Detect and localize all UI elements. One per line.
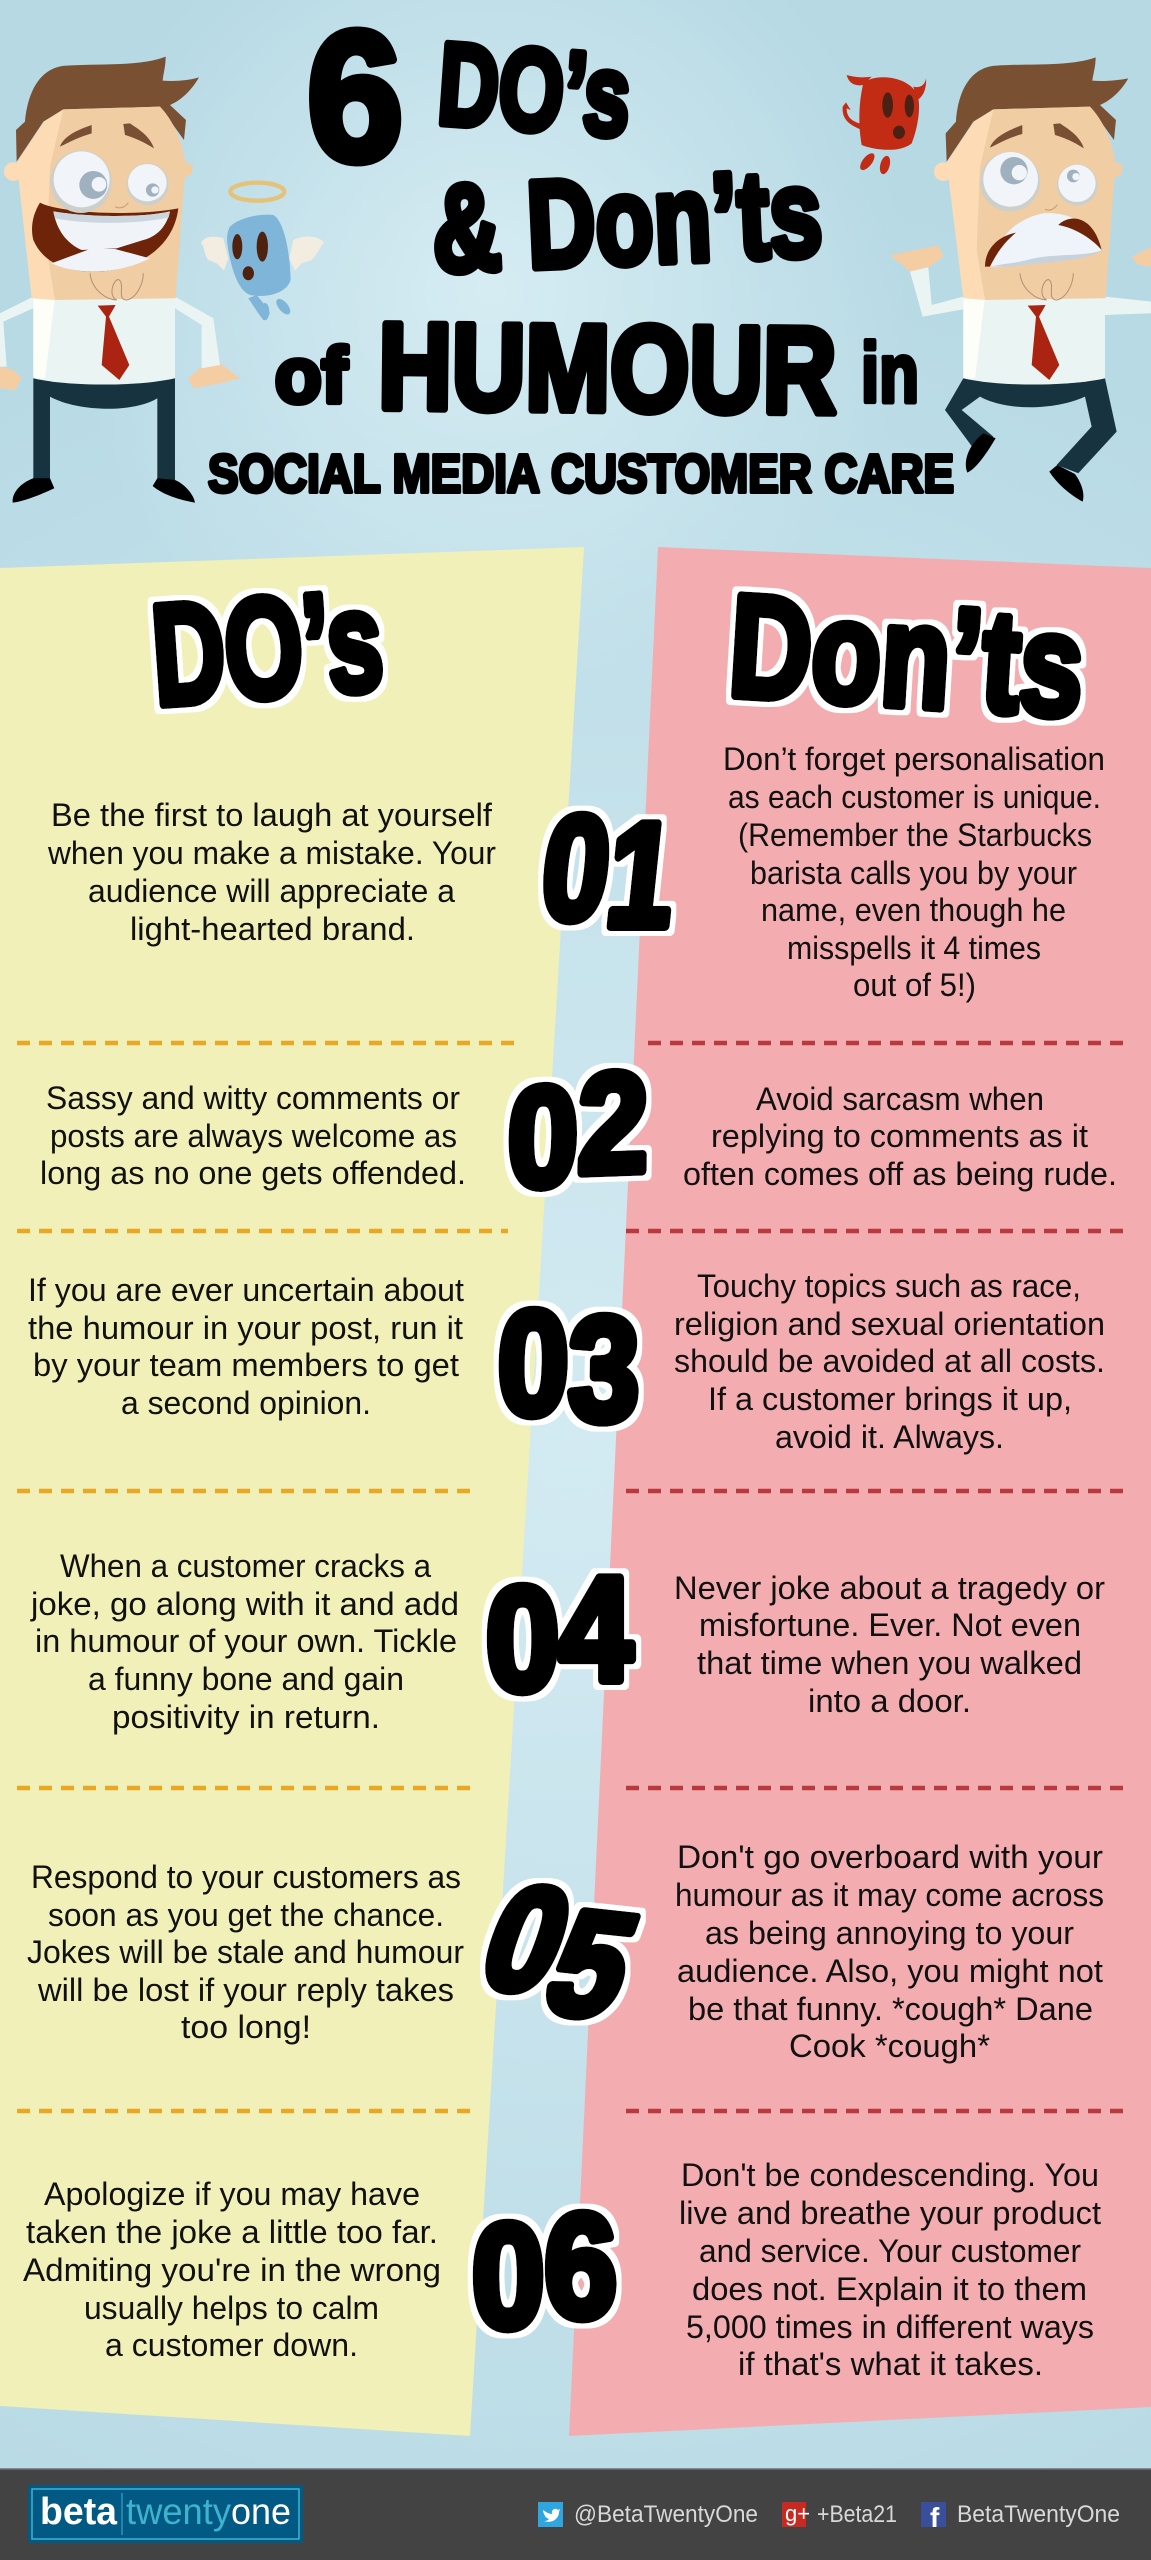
heading: DO's: DO’s — [147, 561, 388, 736]
text: do 06 — [23, 2176, 441, 2363]
text: do 04: joke, go along with it and add — [30, 1586, 459, 1622]
text: do 02 — [40, 1080, 466, 1191]
number 03: 3 — [567, 1287, 641, 1452]
text: don't 01: out of 5!) — [853, 967, 976, 1003]
text: don't 06: does not. Explain it to them — [692, 2271, 1087, 2307]
text: do 05: soon as you get the chance. — [48, 1897, 444, 1933]
twitter handle: @BetaTwentyOne — [574, 2501, 758, 2528]
text: don't 01: as each customer is unique. — [728, 779, 1101, 815]
number 04: 0 — [486, 1556, 559, 1722]
divider 2 — [17, 1229, 1125, 1233]
number 01 — [534, 786, 684, 958]
number 04 — [486, 1546, 633, 1722]
text: do 06: taken the joke a little too far. — [26, 2214, 438, 2250]
text: don't 03 — [674, 1268, 1105, 1455]
text: don't 01: barista calls you by your — [750, 855, 1077, 891]
divider 4 — [17, 1786, 1125, 1790]
text: don't 03: Touchy topics such as race, — [697, 1268, 1081, 1304]
text: don't 06: Don't be condescending. You — [681, 2157, 1099, 2193]
logo: beta twentyone: beta — [40, 2491, 118, 2533]
footer bar — [0, 2468, 1151, 2560]
text: do 02: long as no one gets offended. — [40, 1155, 466, 1191]
number 05 — [457, 1854, 662, 2049]
text: don't 03: If a customer brings it up, — [708, 1381, 1072, 1417]
text: do 04: When a customer cracks a — [60, 1548, 432, 1584]
text: don't 04: into a door. — [808, 1683, 971, 1719]
number 02: 2 — [577, 1043, 650, 1204]
illustration: smiling man — [0, 57, 240, 503]
google plus handle: g+ — [785, 2501, 810, 2526]
title: 6 DO's & Don'ts of HUMOUR in SOCIAL MEDIA CUSTOMER CARE: in — [861, 326, 919, 420]
text: do 04: in humour of your own. Tickle — [35, 1623, 457, 1659]
title: 6 DO's & Don'ts of HUMOUR in SOCIAL MEDIA CUSTOMER CARE: HUMOUR — [378, 298, 837, 439]
logo: beta twentyone — [28, 2485, 303, 2543]
number 01: 1 — [600, 793, 683, 958]
text: don't 03: avoid it. Always. — [775, 1419, 1004, 1455]
text: do 05: Respond to your customers as — [31, 1859, 461, 1895]
text: do 03: If you are ever uncertain about — [28, 1272, 464, 1308]
number 01: 0 — [535, 786, 618, 951]
number 06: 0 — [472, 2193, 544, 2359]
icon: devil character — [840, 75, 926, 175]
facebook handle: f — [930, 2502, 940, 2533]
text: do 06: Apologize if you may have — [44, 2176, 420, 2212]
text: do 06: Admiting you're in the wrong — [23, 2252, 441, 2288]
text: don't 05: audience. Also, you might not — [677, 1953, 1103, 1989]
text: do 04: a funny bone and gain — [88, 1661, 404, 1697]
google plus handle: +Beta21 — [817, 2501, 897, 2528]
title: 6 DO's & Don'ts of HUMOUR in SOCIAL MEDIA CUSTOMER CARE: of — [275, 331, 348, 419]
panel: Don'ts background — [569, 547, 1151, 2436]
text: don't 01: name, even though he — [761, 892, 1066, 928]
illustration: scared man — [890, 57, 1151, 502]
number 04: 4 — [559, 1546, 633, 1712]
text: do 01 — [47, 797, 496, 947]
number 06 — [472, 2183, 617, 2359]
text: don't 01: misspells it 4 times — [787, 930, 1041, 966]
number 06: 6 — [544, 2183, 617, 2349]
text: don't 02 — [683, 1081, 1117, 1192]
text: don't 03: religion and sexual orientation — [674, 1306, 1105, 1342]
facebook handle: BetaTwentyOne — [957, 2501, 1120, 2528]
text: do 05: Jokes will be stale and humour — [27, 1934, 464, 1970]
logo: beta twentyone: twenty — [126, 2491, 231, 2532]
divider 1 — [17, 1041, 1125, 1045]
text: don't 02: replying to comments as it — [711, 1118, 1088, 1154]
text: don't 06: 5,000 times in different ways — [686, 2309, 1094, 2345]
text: do 05: too long! — [181, 2009, 311, 2045]
text: don't 05: Cook *cough* — [789, 2028, 990, 2064]
text: don't 05: be that funny. *cough* Dane — [688, 1991, 1093, 2027]
text: don't 01 — [723, 741, 1105, 1003]
text: do 03: by your team members to get — [33, 1347, 459, 1383]
text: don't 06: if that's what it takes. — [738, 2346, 1043, 2382]
number 03 — [496, 1281, 641, 1452]
title: 6 DO's & Don'ts of HUMOUR in SOCIAL MEDIA CUSTOMER CARE: DO’s — [434, 18, 635, 161]
text: don't 01: Don’t forget personalisation — [723, 741, 1105, 777]
text: don't 01: (Remember the Starbucks — [738, 817, 1092, 853]
google plus handle — [782, 2501, 897, 2528]
divider 3 — [17, 1489, 1125, 1493]
text: do 01: when you make a mistake. Your — [47, 835, 496, 871]
text: do 05 — [27, 1859, 464, 2045]
text: don't 02: Avoid sarcasm when — [756, 1081, 1044, 1117]
text: don't 05: humour as it may come across — [675, 1877, 1104, 1913]
text: do 04: positivity in return. — [112, 1699, 380, 1735]
text: do 01: light-hearted brand. — [130, 911, 415, 947]
number 02 — [506, 1043, 650, 1218]
number 03: 0 — [496, 1281, 570, 1446]
divider 5 — [17, 2109, 1125, 2113]
text: do 03: the humour in your post, run it — [28, 1310, 463, 1346]
text: don't 04: misfortune. Ever. Not even — [699, 1607, 1081, 1643]
text: do 06: usually helps to calm — [84, 2290, 379, 2326]
panel: DO's background — [0, 547, 584, 2436]
text: do 02: Sassy and witty comments or — [46, 1080, 460, 1116]
icon: angel character — [201, 183, 324, 320]
text: do 01: Be the first to laugh at yourself — [51, 797, 493, 833]
text: don't 05 — [675, 1839, 1104, 2064]
text: do 03 — [28, 1272, 464, 1421]
text: don't 06: live and breathe your product — [679, 2195, 1101, 2231]
facebook handle — [921, 2501, 1120, 2533]
number 05: 0 — [463, 1854, 591, 2023]
text: don't 03: should be avoided at all costs. — [674, 1343, 1105, 1379]
text: don't 04: that time when you walked — [697, 1645, 1082, 1681]
text: don't 05: Don't go overboard with your — [677, 1839, 1103, 1875]
title: 6 DO's & Don'ts of HUMOUR in SOCIAL MEDIA CUSTOMER CARE: & Don’ts — [429, 144, 825, 299]
text: do 02: posts are always welcome as — [50, 1118, 457, 1154]
text: don't 05: as being annoying to your — [705, 1915, 1074, 1951]
title: 6 DO's & Don'ts of HUMOUR in SOCIAL MEDIA CUSTOMER CARE — [208, 0, 954, 504]
text: don't 04 — [674, 1570, 1105, 1719]
text: don't 04: Never joke about a tragedy or — [674, 1570, 1105, 1606]
text: don't 02: often comes off as being rude. — [683, 1156, 1117, 1192]
text: don't 06: and service. Your customer — [699, 2233, 1081, 2269]
number 05: 5 — [528, 1879, 656, 2049]
text: do 01: audience will appreciate a — [88, 873, 456, 909]
text: do 04 — [30, 1548, 459, 1735]
text: don't 06 — [679, 2157, 1101, 2382]
title: 6 DO's & Don'ts of HUMOUR in SOCIAL MEDIA CUSTOMER CARE: SOCIAL MEDIA CUSTOMER CARE — [208, 444, 954, 504]
logo: beta twentyone: one — [231, 2491, 291, 2532]
text: do 05: will be lost if your reply takes — [37, 1972, 454, 2008]
text: do 06: a customer down. — [105, 2327, 358, 2363]
number 02: 0 — [506, 1057, 579, 1218]
text: do 03: a second opinion. — [121, 1385, 371, 1421]
